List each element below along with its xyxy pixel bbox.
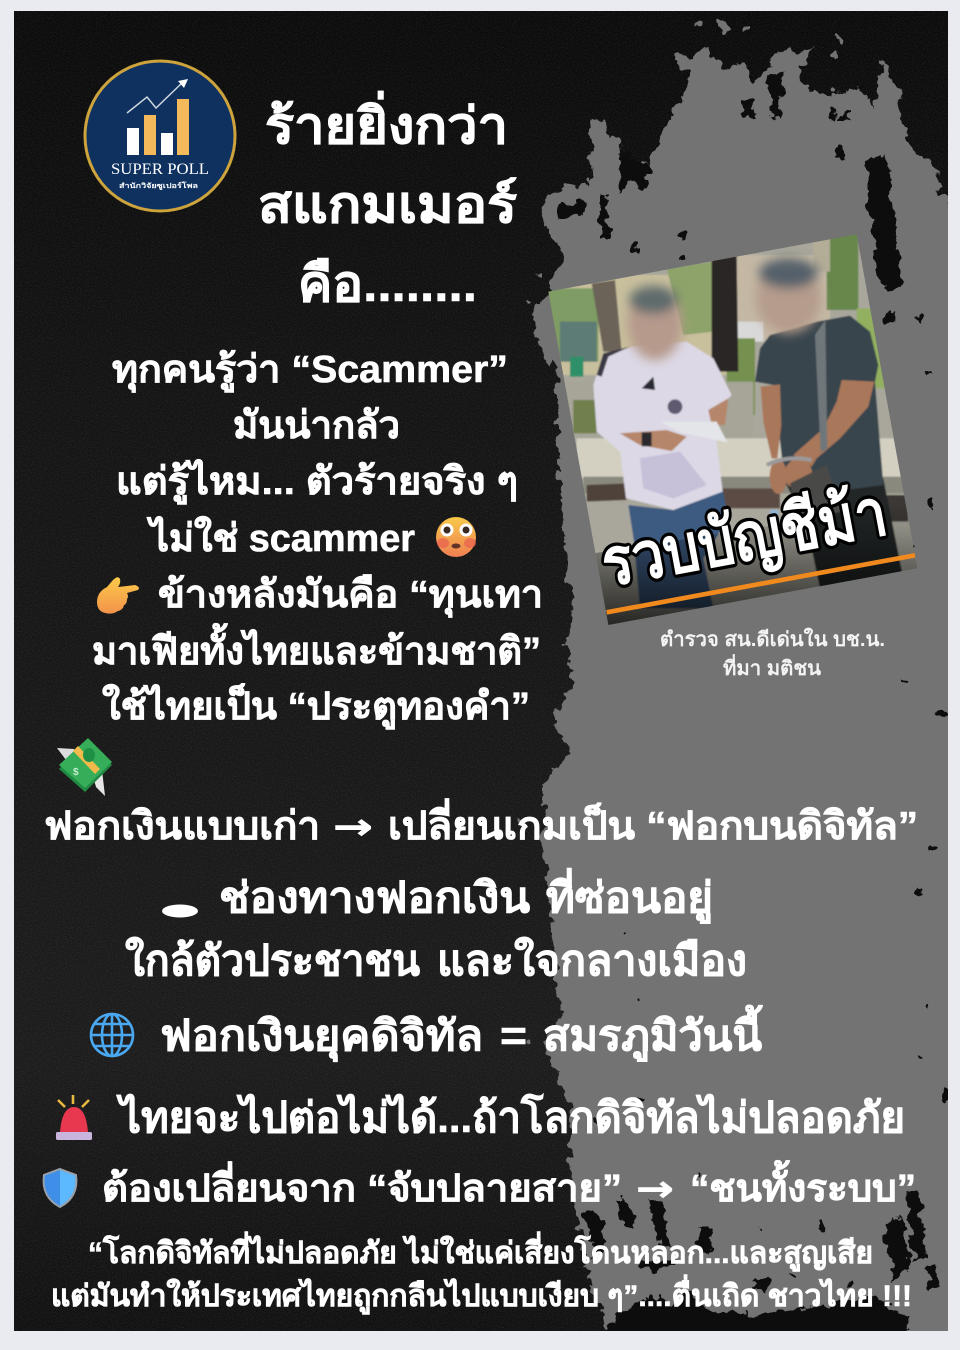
photo: blurred faces bbox=[628, 258, 821, 360]
photo headline: รวบบัญชีม้า bbox=[596, 476, 893, 602]
text: Thailand cannot go on: ไทยจะไปต่อไม่ได้...ถ้าโลกดิจิทัลไม่ปลอดภัย bbox=[116, 1093, 905, 1141]
text block: intro: มันน่ากลัว bbox=[233, 405, 400, 447]
heading: old vs digital laundering: ฟอกเงินแบบเก่า bbox=[44, 805, 320, 848]
heading: old vs digital laundering: เปลี่ยนเกมเป็น “ฟอกบนดิจิทัล” bbox=[388, 798, 918, 848]
text block: hidden channels: ที่ซ่อนอยู่ bbox=[546, 868, 713, 924]
text block: hidden channels: ช่องทางฟอกเงิน bbox=[219, 874, 530, 921]
text: change the approach bbox=[102, 1160, 916, 1210]
caption: ที่มา มติชน bbox=[723, 653, 821, 680]
text: change the approach: “ชนทั้งระบบ” bbox=[690, 1160, 916, 1210]
title: สแกมเมอร์ bbox=[258, 177, 517, 233]
title: ร้ายยิ่งกว่า bbox=[265, 91, 508, 154]
text: digital battlefield: ฟอกเงินยุคดิจิทัล bbox=[160, 1012, 483, 1062]
icon: white disc bbox=[162, 904, 198, 918]
photo: bottom shade bbox=[596, 517, 918, 625]
text block: closing quote: “โลกดิจิทัลที่ไม่ปลอดภัย ไม่ใช่แค่เสี่ยงโดนหลอก...และสูญเสีย bbox=[88, 1231, 873, 1272]
logo: Super Poll badge: สำนักวิจัยซูเปอร์โพล bbox=[119, 181, 198, 191]
text block: intro: มาเฟียทั้งไทยและข้ามชาติ” bbox=[92, 623, 541, 673]
icon: shield bbox=[44, 1169, 76, 1207]
heading: old vs digital laundering: → bbox=[333, 807, 373, 848]
heading: old vs digital laundering bbox=[44, 798, 918, 848]
icon: pointing hand bbox=[97, 577, 139, 614]
title: คือ........ bbox=[298, 256, 477, 312]
photo background bbox=[547, 233, 917, 522]
text block: intro bbox=[92, 349, 543, 730]
text block: closing quote bbox=[51, 1231, 912, 1315]
person: man in white shirt bbox=[593, 342, 732, 608]
text: digital battlefield: สมรภูมิวันนี้ bbox=[543, 1004, 764, 1062]
panel: grunge grey area bbox=[517, 17, 960, 1350]
text: change the approach: ต้องเปลี่ยนจาก “จับปลายสาย” bbox=[102, 1161, 622, 1210]
text block: hidden channels: ใกล้ตัวประชาชน bbox=[125, 936, 420, 984]
icon: globe bbox=[91, 1014, 133, 1056]
caption: ตำรวจ สน.ดีเด่นใน บช.น. bbox=[660, 627, 885, 651]
title bbox=[258, 91, 517, 312]
icon: money with wings bbox=[57, 738, 112, 796]
text block: closing quote: แต่มันทำให้ประเทศไทยถูกกลืนไปแบบเงียบ ๆ”....ตื่นเถิด ชาวไทย !!! bbox=[51, 1274, 912, 1315]
text block: intro: ไม่ใช่ scammer bbox=[146, 516, 415, 560]
text block: hidden channels: และใจกลางเมือง bbox=[437, 936, 747, 984]
text: change the approach: → bbox=[636, 1169, 674, 1210]
text block: intro: ข้างหลังมันคือ “ทุนเทา bbox=[158, 574, 543, 618]
icon: money with wings: $ bbox=[73, 767, 79, 778]
photo: arrest of suspect bbox=[548, 234, 917, 625]
logo: Super Poll badge: SUPER POLL bbox=[111, 161, 209, 178]
caption bbox=[660, 627, 885, 680]
icon: flushed face bbox=[436, 517, 476, 557]
person: man in dark shirt bbox=[755, 316, 903, 588]
text block: intro: แต่รู้ไหม... ตัวร้ายจริง ๆ bbox=[116, 459, 518, 505]
text: digital battlefield bbox=[160, 1004, 764, 1062]
icon: siren bbox=[56, 1095, 92, 1140]
text block: intro: ใช้ไทยเป็น “ประตูทองคำ” bbox=[102, 683, 530, 730]
logo: Super Poll badge bbox=[85, 61, 235, 211]
text: digital battlefield: = bbox=[500, 1012, 527, 1059]
text block: intro: ทุกคนรู้ว่า “Scammer” bbox=[112, 349, 508, 393]
photo: orange rule bbox=[607, 555, 917, 612]
text block: hidden channels bbox=[125, 868, 747, 984]
